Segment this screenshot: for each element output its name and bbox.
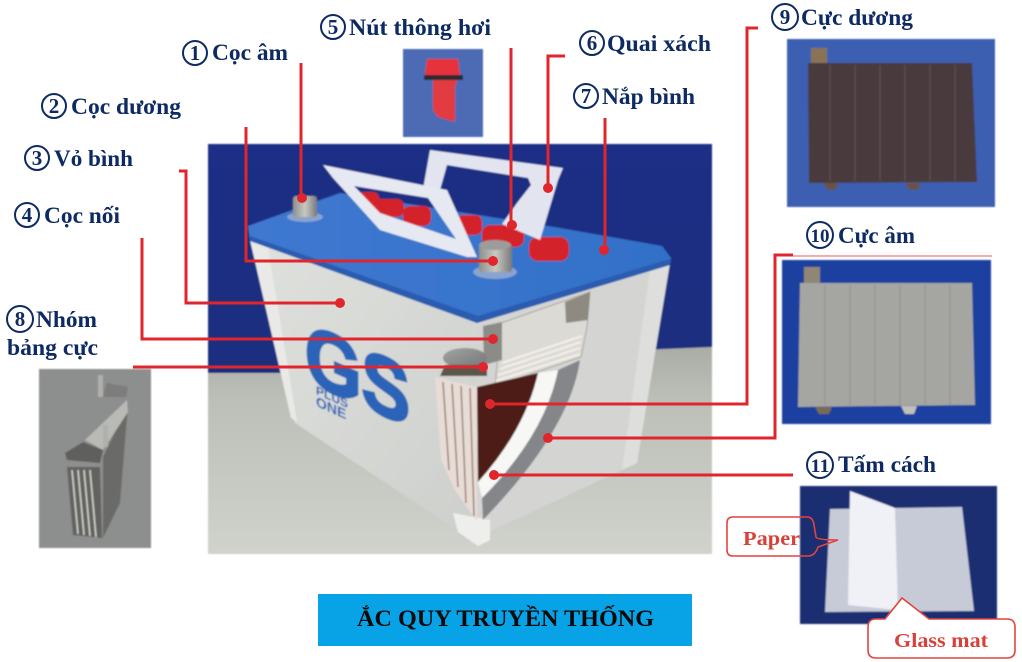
leader line 8: Nhóm bảng cực xyxy=(133,362,488,372)
rear handle xyxy=(422,150,563,240)
title banner: ẮC QUY TRUYỀN THỐNG xyxy=(357,605,654,631)
leader line 2: Cọc dương xyxy=(246,127,498,266)
main battery photo xyxy=(208,144,712,554)
battery right face xyxy=(477,263,670,543)
photo: positive plate xyxy=(787,39,995,207)
leader line 3: Vỏ bình xyxy=(179,171,345,308)
label 10: Cực âm xyxy=(838,223,915,248)
label 4: 4 xyxy=(22,203,33,227)
label 5: Nút thông hơi xyxy=(349,15,492,40)
label 10: 10 xyxy=(810,226,830,247)
photo: separator sheets xyxy=(800,486,997,624)
callout: Glass mat: Glass mat xyxy=(894,630,988,652)
callout: Glass mat xyxy=(868,598,1015,658)
photo: plate group xyxy=(39,369,151,548)
callout: Paper: Paper xyxy=(743,528,800,550)
cutaway upper window xyxy=(495,292,590,386)
leader line 9: Cực dương xyxy=(485,28,758,409)
label 11: 11 xyxy=(810,456,830,477)
front terminal post xyxy=(473,240,517,279)
GS logo: ONE xyxy=(316,395,347,423)
label 1: Cọc âm xyxy=(212,40,288,65)
label 8: 8 xyxy=(15,307,25,331)
battery lid xyxy=(248,193,671,323)
title banner xyxy=(318,594,692,646)
photo: negative plate xyxy=(782,260,991,424)
leader line 10: Cực âm xyxy=(543,255,992,443)
GS logo: GS xyxy=(305,304,410,445)
label 7: Nắp bình xyxy=(602,84,695,109)
label 2: Cọc dương xyxy=(71,94,181,119)
label 6: Quai xách xyxy=(607,31,711,56)
leader line 4: Cọc nối xyxy=(142,238,498,344)
label 9: Cực dương xyxy=(801,5,914,30)
cutaway gray band xyxy=(482,360,580,520)
label 3: Vỏ bình xyxy=(54,146,133,171)
front handle xyxy=(323,165,477,257)
leader line 6: Quai xách xyxy=(543,56,565,193)
vent caps xyxy=(357,192,569,261)
leader line 5: Nút thông hơi xyxy=(507,48,517,230)
label 8 xyxy=(7,306,98,360)
leader line 1: Cọc âm xyxy=(297,63,307,203)
label 6: 6 xyxy=(587,31,597,55)
label 8: Nhóm xyxy=(36,307,97,332)
label 1: 1 xyxy=(190,41,200,65)
leader line 11: Tấm cách xyxy=(489,470,793,480)
label 5: 5 xyxy=(328,15,338,39)
label 9: 9 xyxy=(780,5,790,29)
cutaway positive plate xyxy=(477,373,538,482)
metal strap and connector xyxy=(440,322,502,376)
back terminal post xyxy=(287,196,323,222)
label 3: 3 xyxy=(32,146,42,170)
label 2: 2 xyxy=(49,94,59,118)
label 8: bảng cực xyxy=(7,335,98,360)
photo: vent cap xyxy=(403,49,483,137)
label 4: Cọc nối xyxy=(44,203,121,228)
cutaway white separator xyxy=(478,370,558,498)
battery left face xyxy=(250,240,477,543)
callout: Paper xyxy=(727,517,838,556)
plate stack xyxy=(435,377,477,522)
GS logo: PLUS xyxy=(316,384,348,411)
label 10 xyxy=(807,222,915,248)
leader line 7: Nắp bình xyxy=(599,118,609,255)
red vent plug xyxy=(424,59,463,122)
label 7: 7 xyxy=(581,84,591,108)
label 11: Tấm cách xyxy=(838,452,936,477)
